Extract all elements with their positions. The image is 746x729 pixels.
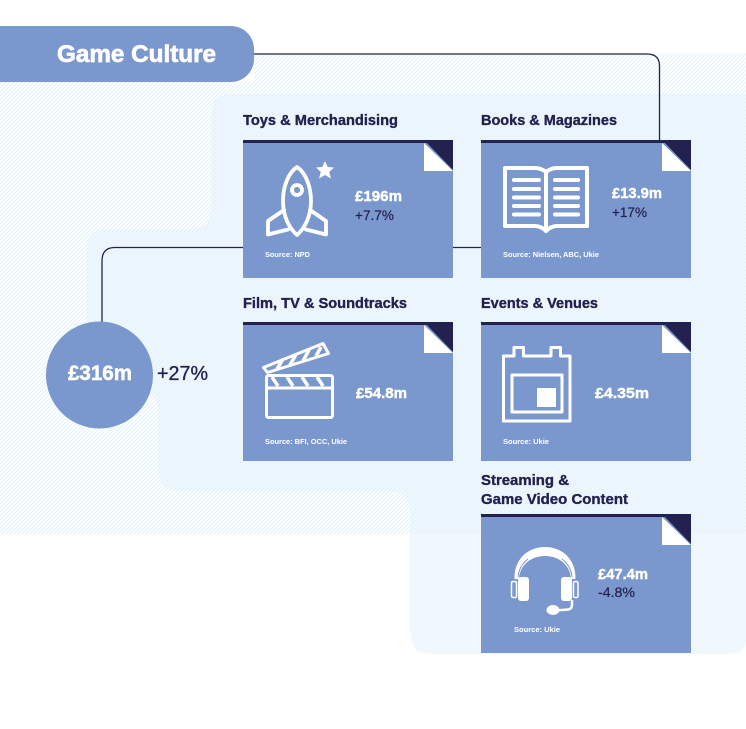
icon: calendar [504, 348, 570, 421]
background: hatched band [0, 53, 746, 534]
connector lines [102, 54, 660, 322]
source: Source: Ukie [503, 439, 549, 446]
value: £54.8m [356, 386, 407, 402]
heading line two: Game Video Content [481, 492, 628, 508]
value: £4.35m [595, 386, 649, 402]
background: inner pale blue region [87, 94, 746, 654]
heading: Events & Venues [481, 296, 598, 312]
growth: +17% [612, 204, 647, 220]
heading: Streaming & [481, 473, 570, 489]
heading: Toys & Merchandising [243, 113, 398, 129]
title pill [0, 26, 254, 82]
heading: Books & Magazines [481, 113, 617, 129]
growth: +7.7% [355, 207, 394, 223]
value: £13.9m [612, 186, 662, 202]
source: Source: Nielsen, ABC, Ukie [503, 252, 599, 259]
total circle [46, 322, 153, 428]
total value: £316m [68, 362, 132, 385]
icon: headset [512, 547, 578, 615]
panel: streaming and game video content [481, 473, 691, 653]
total growth: +27% [157, 363, 208, 385]
source: Source: BFI, OCC, Ukie [265, 439, 347, 446]
panel: toys and merchandising [243, 113, 453, 278]
icon: rocket [268, 161, 334, 235]
icon: clapperboard [264, 344, 332, 418]
icon: open book [505, 168, 587, 231]
growth: -4.8% [598, 584, 635, 600]
source: Source: Ukie [514, 627, 560, 634]
panel: books and magazines [481, 113, 691, 278]
title: Game Culture [57, 41, 216, 68]
value: £196m [355, 189, 402, 205]
heading: Film, TV & Soundtracks [243, 296, 407, 312]
panel: events and venues [481, 296, 691, 461]
panel: film, tv and soundtracks [243, 296, 453, 461]
value: £47.4m [598, 567, 648, 583]
source: Source: NPD [265, 252, 310, 259]
